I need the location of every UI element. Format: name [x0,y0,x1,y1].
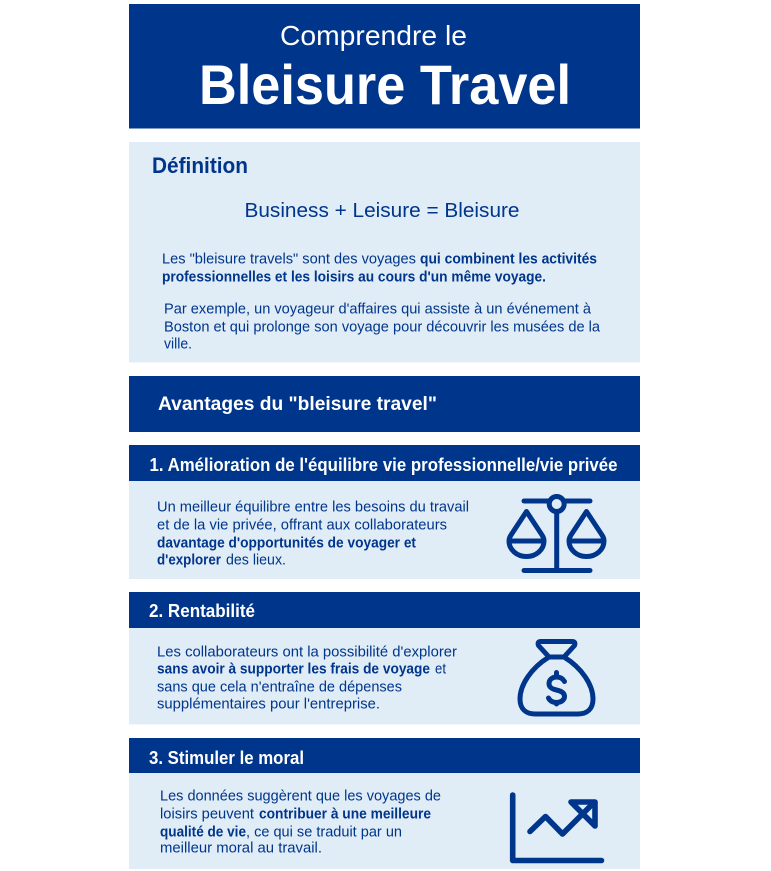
body: cost effectiveness: supplémentaires pour l'entreprise. [157,695,380,712]
body: work-life balance [129,481,640,579]
panel: definition [129,142,640,362]
body: work-life balance: davantage d'opportunités de voyager et [157,534,416,551]
text block: definition: Les "bleisure travels" sont des voyages [162,250,416,267]
title banner: Bleisure Travel [199,53,571,116]
text block: example [164,300,601,352]
formula: Business + Leisure = Bleisure [244,199,520,222]
banner: advantages heading [129,376,640,432]
icon: rising chart [513,795,602,860]
header: morale [129,738,640,773]
body: cost effectiveness: sans que cela n'entraîne de dépenses [157,678,402,695]
text block: example: Boston et qui prolonge son voyage pour découvrir les musées de la [164,318,601,335]
banner: advantages heading: Avantages du "bleisure travel" [158,393,437,415]
body: work-life balance: et de la vie privée, offrant aux collaborateurs [157,516,447,533]
body: morale: loisirs peuvent [160,805,255,822]
icon: money bag [520,642,593,714]
body: cost effectiveness: sans avoir à supporter les frais de voyage [157,660,430,677]
body: cost effectiveness [129,628,640,724]
body: work-life balance: des lieux. [226,551,286,568]
heading: definition: Définition [152,153,248,178]
text block: definition: professionnelles et les loisirs au cours d'un même voyage. [162,268,546,285]
header: morale: 3. Stimuler le moral [149,748,304,768]
body: morale: qualité de vie [160,823,246,840]
text block: example: Par exemple, un voyageur d'affaires qui assiste à un événement à [164,300,592,317]
body: cost effectiveness: Les collaborateurs ont la possibilité d'explorer [157,643,457,660]
panel: cost effectiveness [129,592,640,724]
text block: definition [162,250,597,285]
body: morale: meilleur moral au travail. [160,839,322,856]
title banner [129,4,640,128]
body: work-life balance: Un meilleur équilibre entre les besoins du travail [157,498,469,515]
icon: balance scales [509,496,604,570]
panel: work-life balance [129,445,640,579]
text block: definition: qui combinent les activités [420,250,597,267]
body: morale: Les données suggèrent que les voyages de [160,787,441,804]
header: cost effectiveness [129,592,640,628]
text block: example: ville. [164,335,192,352]
body: morale: , ce qui se traduit par un [246,823,402,840]
body: cost effectiveness: et [435,660,447,677]
header: cost effectiveness: 2. Rentabilité [149,601,255,621]
header: work-life balance [129,445,640,481]
title banner: Comprendre le [280,20,467,51]
body: work-life balance: d'explorer [157,551,221,568]
header: work-life balance: 1. Amélioration de l'équilibre vie professionnelle/vie privée [150,455,618,475]
body: morale [129,773,640,869]
panel: morale [129,738,640,869]
body: morale: contribuer à une meilleure [259,805,431,822]
